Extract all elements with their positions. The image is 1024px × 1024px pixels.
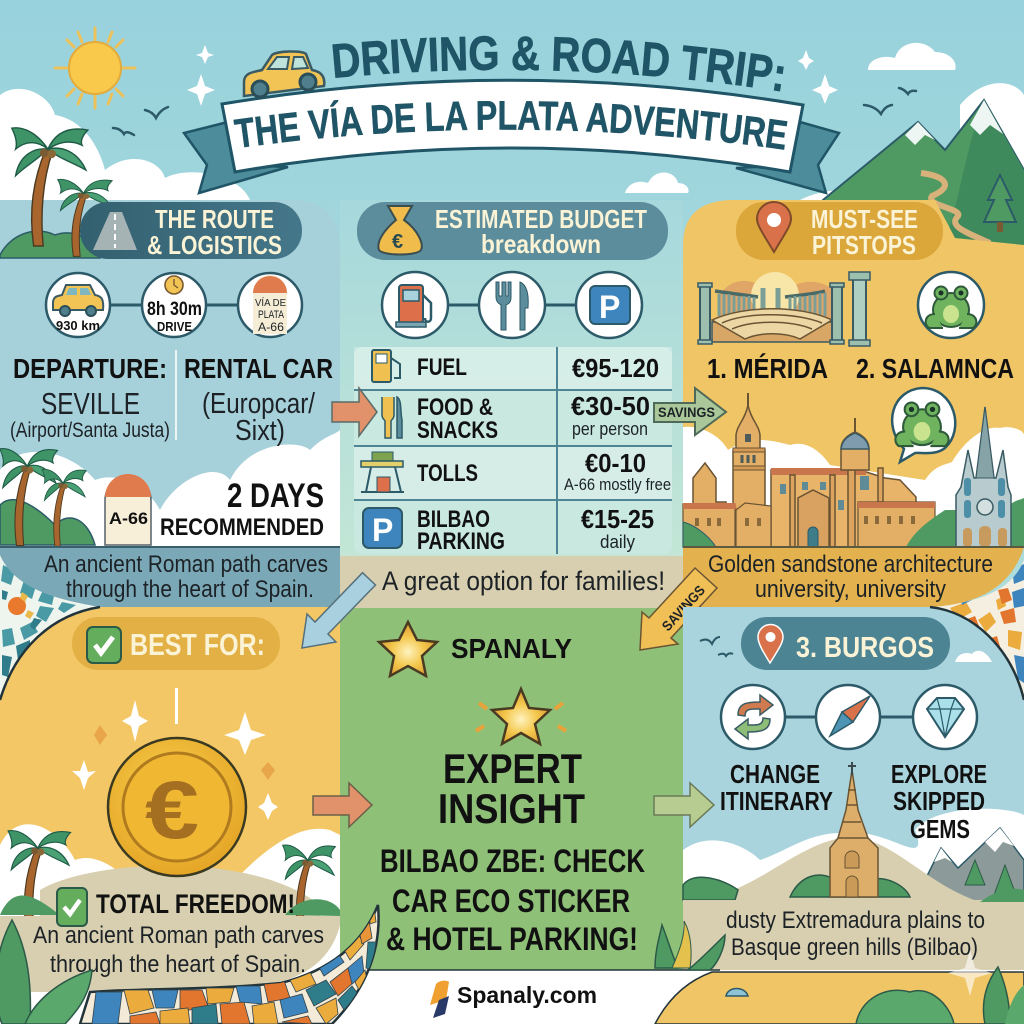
caption: route: An ancient Roman path carves [44, 551, 328, 578]
icon: change arrows [721, 685, 785, 749]
rental car text: RENTAL CAR [184, 353, 333, 384]
plants bottom right [856, 950, 1024, 1024]
sparkles and birds [113, 45, 916, 135]
route icon row [46, 273, 302, 337]
expert insight text: CAR ECO STICKER [392, 883, 630, 919]
expert insight text: & HOTEL PARKING! [386, 921, 638, 957]
row: food and snacks: FOOD & [417, 394, 493, 421]
caption band: total freedom: An ancient Roman path carves [33, 922, 324, 949]
pill: best for [72, 617, 280, 670]
icon: parking [576, 272, 642, 338]
heading: spanaly [379, 622, 572, 676]
icon: drive time: 8h 30m [147, 299, 202, 320]
pill: estimated budget: ESTIMATED BUDGET [435, 204, 647, 234]
facade [798, 490, 829, 547]
panel: must-see pitstops background [683, 200, 1024, 547]
arrow: orange to insight [313, 783, 372, 827]
burgos caption: dusty Extremadura plains to [726, 907, 985, 934]
plants bottom left [0, 920, 92, 1024]
pill: estimated budget: breakdown [481, 229, 601, 259]
icon: diamond [913, 685, 977, 749]
left mosaic corner [0, 556, 96, 696]
palm trees top left [0, 128, 112, 258]
icon: check [57, 888, 87, 926]
arrow: blue diagonal [302, 573, 376, 648]
icon: A-66 milestone [238, 273, 302, 337]
icon: drive time: DRIVE [157, 320, 192, 334]
ribbon banner [182, 78, 841, 195]
expert insight text: BILBAO ZBE: CHECK [380, 843, 645, 879]
row: parking: BILBAO [417, 506, 490, 533]
footer strip [340, 970, 1024, 1024]
burgos labels: ITINERARY [720, 786, 833, 816]
icon: cutlery [479, 272, 545, 338]
row: fuel [372, 350, 659, 383]
icon: car 930 km: 930 km [56, 319, 100, 333]
cathedral nave [771, 470, 916, 547]
gothic church [956, 407, 1011, 547]
icon: drive time [142, 273, 206, 337]
caption band: total freedom: through the heart of Spain. [50, 951, 306, 978]
row: food and snacks: SNACKS [417, 417, 498, 444]
icon: milestone [105, 474, 151, 545]
row: parking: daily [600, 532, 635, 552]
row: tolls: €0-10 [585, 448, 646, 478]
pill: estimated budget [357, 202, 668, 260]
rental car text: Sixt) [235, 415, 285, 447]
heading: spanaly: SPANALY [451, 633, 572, 664]
burgos labels: EXPLORE [891, 759, 987, 789]
row: parking: €15-25 [581, 504, 654, 534]
icon: milestone: A-66 [109, 509, 148, 528]
row: parking [363, 504, 654, 555]
caption: golden sandstone: university, university [755, 576, 946, 603]
expert insight text: EXPERT [443, 745, 582, 792]
icon: A-66 milestone: A-66 [258, 320, 284, 334]
burgos labels: CHANGE [730, 759, 820, 789]
pill: estimated budget: € [392, 231, 403, 253]
departure text [10, 353, 170, 442]
icon: parking: P [599, 289, 620, 325]
row: parking: PARKING [417, 528, 505, 555]
row: food and snacks [382, 391, 650, 444]
rental car text: (Europcar/ [202, 388, 316, 420]
merida and salamanca labels [707, 353, 1014, 384]
icon: compass [816, 685, 880, 749]
speech bubble with frog [892, 388, 955, 462]
burgos caption [726, 907, 985, 961]
caption band: total freedom: TOTAL FREEDOM! [96, 889, 295, 919]
row: fuel: €95-120 [572, 353, 659, 383]
rental car text [175, 350, 333, 447]
budget icon row [382, 272, 642, 338]
title car [244, 51, 324, 97]
2 days recommended: RECOMMENDED [160, 514, 324, 541]
burgos labels: SKIPPED [893, 786, 985, 816]
burgos icons [721, 685, 977, 749]
star with rays [476, 689, 566, 744]
callout: great option: A great option for families! [382, 566, 665, 596]
icon: A-66 milestone: VÍA DE [255, 296, 286, 309]
arrow: green to burgos [654, 783, 714, 827]
arrow: savings: SAVINGS [658, 404, 715, 420]
panel: best for [0, 607, 340, 1024]
icon: star [379, 622, 437, 676]
panel: expert insight [340, 608, 683, 970]
pill: burgos: 3. BURGOS [796, 632, 934, 664]
euro coin and sparkles [72, 688, 278, 876]
bell tower [733, 393, 765, 510]
plant near insight [655, 921, 725, 970]
banner heading: THE VÍA DE LA PLATA ADVENTURE [233, 100, 788, 150]
icon: check [87, 627, 121, 663]
panel: route and logistics background [0, 200, 340, 547]
arrow: orange to food row [332, 388, 377, 436]
spire [830, 762, 878, 897]
burgos labels: GEMS [910, 814, 970, 844]
panel: burgos [683, 607, 1024, 970]
arrow: savings diagonal: SAVINGS [658, 582, 708, 634]
sun [55, 28, 135, 108]
departure text: SEVILLE [41, 386, 140, 421]
right mosaic corner [936, 560, 1024, 695]
2 days recommended [160, 477, 324, 541]
row: tolls: A-66 mostly free [564, 475, 671, 494]
euro coin and sparkles: € [145, 765, 199, 856]
row: fuel: FUEL [417, 354, 467, 381]
panel: budget background [340, 200, 683, 608]
budget table [354, 347, 672, 555]
clouds behind title [0, 43, 1024, 200]
row: parking: P [372, 512, 393, 548]
row: food and snacks: €30-50 [571, 391, 650, 421]
pill: the route: THE ROUTE [155, 204, 274, 234]
pill: must-see: MUST-SEE [811, 204, 918, 234]
logo: Spanaly.com [457, 982, 597, 1008]
expert insight text [380, 745, 645, 957]
bottom mosaic [80, 905, 379, 1024]
caption band: total freedom [0, 888, 340, 992]
merida and salamanca labels: 1. MÉRIDA [707, 353, 828, 384]
left small tower [686, 463, 726, 545]
departure text: (Airport/Santa Justa) [10, 419, 170, 442]
departure text: DEPARTURE: [13, 353, 167, 384]
mountains [823, 100, 1024, 260]
2 days recommended: 2 DAYS [227, 477, 324, 515]
pill: burgos [741, 617, 950, 670]
caption: route [0, 547, 340, 607]
row: food and snacks: per person [572, 419, 648, 439]
row: tolls: TOLLS [417, 460, 478, 487]
salamanca skyline [683, 393, 1024, 547]
logo [430, 981, 597, 1018]
icon: fuel pump [382, 272, 448, 338]
icon: A-66 milestone: PLATA [258, 309, 285, 321]
pill: best for: BEST FOR: [130, 627, 265, 662]
pill: the route [80, 202, 302, 260]
dome [841, 432, 869, 470]
title line: DRIVING & ROAD TRIP: [332, 36, 784, 92]
birds and cloud near burgos [700, 637, 992, 662]
arrow: savings diagonal [640, 568, 717, 650]
icon: frog circle [918, 272, 984, 338]
pill: must-see: PITSTOPS [812, 230, 916, 260]
burgos labels [720, 759, 987, 844]
palm trees and milestone [0, 449, 151, 546]
icon: car 930 km [46, 273, 110, 337]
caption: golden sandstone [683, 547, 1024, 607]
burgos caption: Basque green hills (Bilbao) [731, 934, 978, 961]
row: tolls [361, 448, 671, 494]
pill: must-see [736, 202, 943, 260]
expert insight text: INSIGHT [438, 785, 585, 832]
caption: route: through the heart of Spain. [66, 576, 314, 603]
illustration: roman theatre [698, 272, 870, 346]
arrow: savings [654, 388, 726, 435]
pill: the route: & LOGISTICS [147, 230, 282, 260]
